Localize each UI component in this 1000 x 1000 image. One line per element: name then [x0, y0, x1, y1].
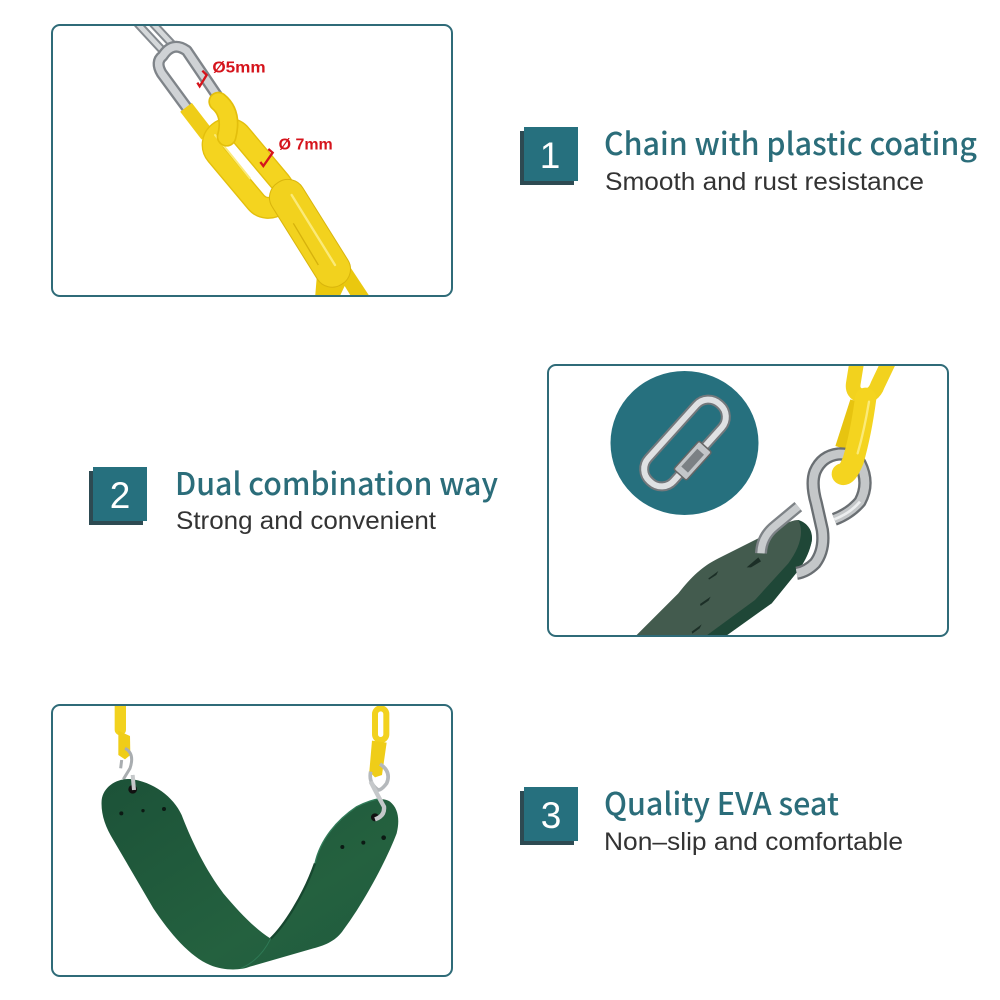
heading 1: Chain with plastic coating — [604, 119, 977, 164]
subheading 3: Non–slip and comfortable — [604, 828, 903, 856]
panel: hook and quick link — [548, 363, 948, 637]
heading 3: Quality EVA seat — [604, 779, 839, 824]
subheading 2: Strong and convenient — [176, 507, 436, 535]
number badge 3 — [520, 787, 578, 845]
feature 1 label — [520, 119, 977, 196]
inset circle — [610, 371, 758, 515]
subheading 1: Smooth and rust resistance — [605, 168, 924, 196]
dimension marker: 5 mm — [197, 60, 266, 86]
panel: full seat — [52, 704, 452, 976]
feature 3 label — [520, 779, 903, 856]
number badge 1 — [520, 127, 578, 185]
dimension marker: 7 mm — [260, 137, 333, 166]
icon: quick link carabiner — [638, 393, 739, 499]
number badge 3: 3 — [541, 795, 561, 836]
dimension marker: 5 mm: Ø5mm — [212, 60, 266, 77]
panel frame — [52, 25, 452, 296]
swing seat photo illustration — [102, 704, 398, 969]
number badge 2 — [89, 467, 147, 525]
dimension marker: 7 mm: Ø 7mm — [279, 137, 333, 154]
number badge 2: 2 — [110, 475, 130, 516]
panel frame — [548, 365, 948, 636]
panel frame — [52, 705, 452, 976]
chain photo illustration — [137, 23, 372, 300]
hook and seat photo illustration — [635, 363, 888, 637]
panel: chain close-up — [52, 23, 452, 300]
number badge 1: 1 — [540, 135, 560, 176]
heading 2: Dual combination way — [175, 459, 498, 504]
feature 2 label — [89, 459, 498, 535]
